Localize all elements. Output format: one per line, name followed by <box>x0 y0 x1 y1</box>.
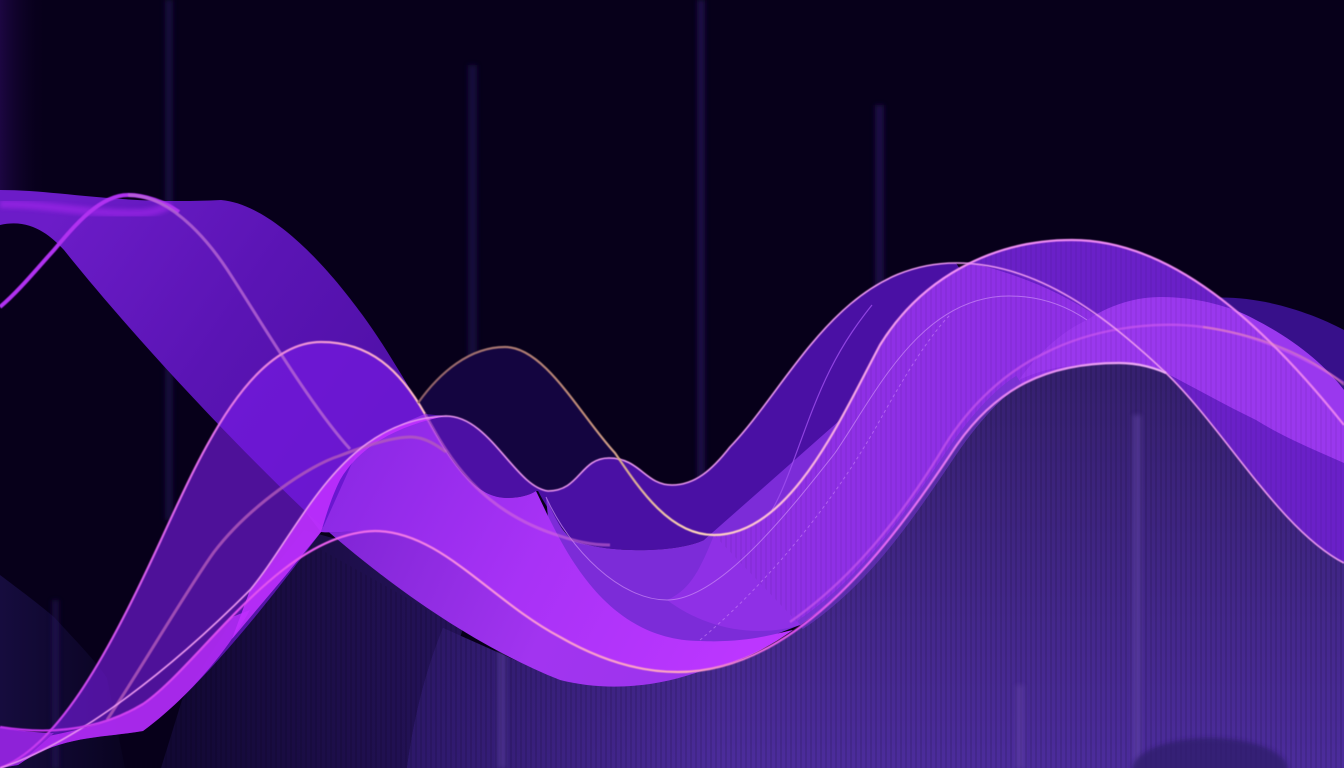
ribbon: dark lobe behind the orange line <box>418 347 620 500</box>
line: upper left descending curve <box>128 195 350 449</box>
stripes over the ribbons <box>714 240 1344 625</box>
shading on the left of the purple field <box>407 628 720 768</box>
line: thin curve beside the centre band <box>772 305 872 510</box>
line: pink edge beside the lattice strip <box>790 325 1344 622</box>
line: orange crest and bright upper ridge <box>418 240 1344 535</box>
line: lower bright wave <box>0 363 1166 730</box>
ribbon: magenta strip up to the crest <box>232 416 446 639</box>
line: thin inner curve on the bright wave <box>546 296 1087 600</box>
faint vertical light bars <box>165 0 884 520</box>
line: rising wave to second crest and centre ridge <box>0 263 1344 768</box>
line: lattice strip along the lower line <box>800 380 1019 625</box>
ribbon: back band at right edge <box>1190 297 1344 440</box>
line: upper left crest curve <box>0 195 179 307</box>
ribbon: left rising sheet <box>0 342 446 768</box>
ribbon: magenta strip at lower left <box>0 610 250 765</box>
line: pink centre line in the right band <box>1203 327 1344 385</box>
ribbon: large upper right wave <box>714 240 1344 625</box>
lower left faint field <box>0 575 125 768</box>
ribbon: upper left band <box>0 190 560 670</box>
brighter vertical bars in the field <box>52 415 1141 768</box>
vertical stripes over the field <box>161 363 1344 768</box>
line: faint rose wave on the left <box>107 437 446 720</box>
ribbon: bright right band <box>1019 297 1344 463</box>
ribbon: bright front sheet <box>321 414 793 672</box>
dark ellipse at bottom right <box>1132 738 1288 768</box>
ribbon: upper left magenta wisp <box>0 204 171 213</box>
ribbon: translucent middle sheet <box>546 420 880 672</box>
ribbon: centre purple band <box>536 263 1000 550</box>
line: faded continuation of the first crest <box>425 414 610 545</box>
line: dashed diagonal inside the right wave <box>700 315 950 640</box>
ribbon: purple wedge at the lower left edge <box>0 727 54 768</box>
ribbon: sheet beneath the lower line <box>304 510 704 687</box>
line: rising wave to first crest <box>0 342 425 768</box>
ribbon: bright face of the right wave <box>667 263 1166 631</box>
lower dark field <box>161 530 464 768</box>
ribbon: lobe beneath the crest line <box>425 414 548 498</box>
lower purple field <box>407 363 1344 768</box>
